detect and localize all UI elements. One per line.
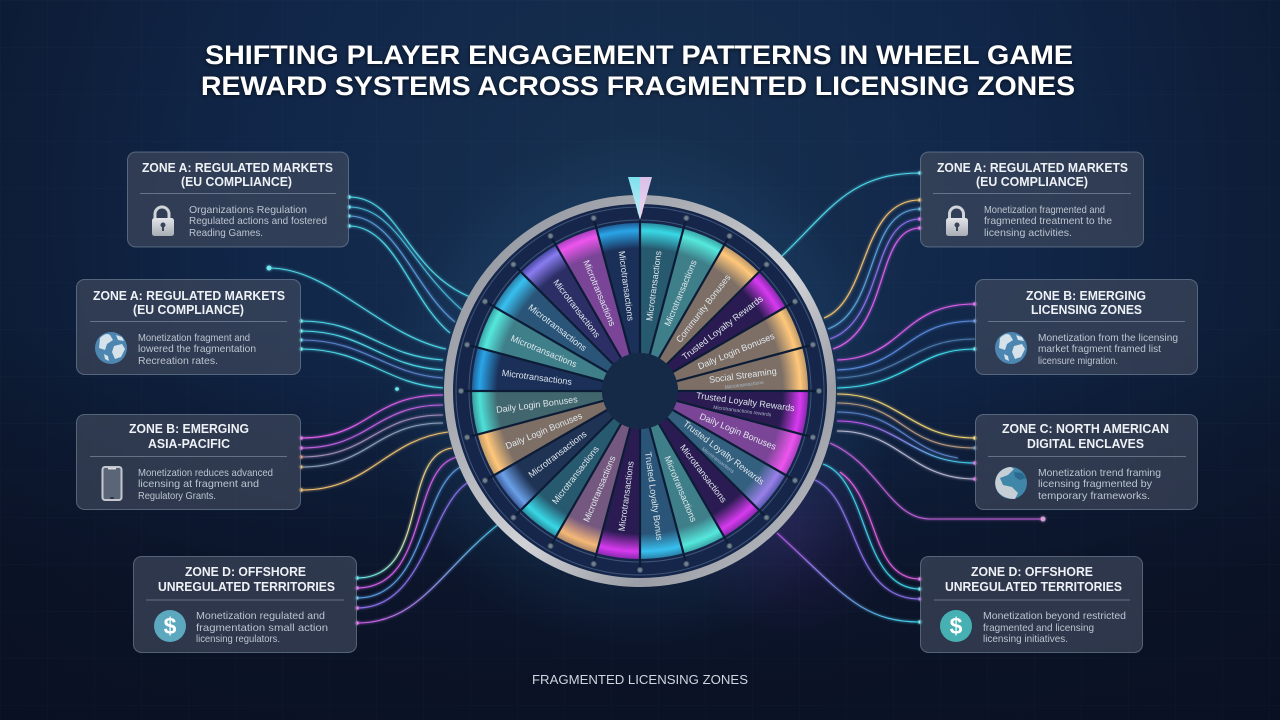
panel: zone A left second: [76, 280, 300, 374]
body text: temporary frameworks.: [1038, 490, 1150, 502]
wheel segment labels: Microtransactions: [678, 442, 729, 505]
heading: ZONE B: EMERGING: [1026, 289, 1146, 303]
body text: [196, 610, 328, 645]
wheel segment labels: Daily Login Bonuses: [698, 411, 778, 452]
heading: [1026, 289, 1146, 317]
icon: globe: [95, 332, 127, 364]
body text: Recreation rates.: [138, 355, 218, 367]
panel: zone C right: [976, 414, 1198, 510]
body text: Monetization trend framing: [1038, 467, 1161, 479]
wheel segment labels: [496, 250, 796, 541]
heading: [937, 161, 1128, 189]
wheel thin rings: [456, 207, 824, 575]
heading: (EU COMPLIANCE): [976, 175, 1088, 189]
heading: (EU COMPLIANCE): [181, 175, 292, 189]
body text: licensing activities.: [984, 227, 1072, 239]
connectors: panel left 2: [299, 319, 443, 391]
connectors: panel right 4: [777, 464, 922, 624]
wheel segment labels: Community Bonuses: [674, 272, 733, 344]
wheel: [448, 200, 832, 582]
body text: [138, 467, 273, 502]
heading: [142, 161, 333, 189]
heading: ZONE A: REGULATED MARKETS: [93, 289, 285, 303]
icon: dollar: [154, 610, 186, 642]
footer label: FRAGMENTED LICENSING ZONES: [532, 673, 748, 687]
body text: lowered the fragmentation: [138, 343, 256, 355]
title: [201, 40, 1075, 101]
heading: ZONE B: EMERGING: [129, 422, 249, 436]
body text: licensing regulators.: [196, 633, 280, 645]
panel: zone A left top: [128, 152, 348, 247]
body text: [984, 204, 1112, 239]
connector: free dot right: [830, 443, 1045, 521]
panel: zone D right: [920, 556, 1142, 652]
heading: DIGITAL ENCLAVES: [1027, 437, 1144, 451]
heading: ZONE D: OFFSHORE: [971, 565, 1093, 579]
body text: [1038, 332, 1178, 367]
wheel segment labels: Daily Login Bonuses: [496, 394, 579, 415]
heading: UNREGULATED TERRITORIES: [158, 580, 335, 594]
connectors: panel left 4: [355, 448, 500, 625]
body text: [138, 332, 256, 367]
icon: dollar: $: [950, 613, 963, 639]
wheel segment labels: Trusted Loyalty Rewards: [696, 390, 796, 413]
wheel base disc: [452, 203, 828, 579]
heading: ZONE A: REGULATED MARKETS: [142, 161, 333, 175]
pointer: [628, 177, 652, 220]
body text: fragmentation small action: [196, 622, 328, 634]
icon: earth: [995, 467, 1027, 499]
wheel segment labels: Trusted Loyalty Rewards: [681, 419, 767, 487]
icon: lock: [946, 207, 968, 236]
heading: LICENSING ZONES: [1031, 303, 1142, 317]
wheel segment labels: Daily Login Bonuses: [696, 331, 776, 372]
wheel segment labels: Trusted Loyalty Bonus: [643, 451, 665, 541]
wheel segment labels: Microtransactions: [662, 258, 699, 328]
body text: Regulated actions and fostered: [189, 215, 327, 227]
wheel segment labels: Microtransactions: [662, 454, 699, 524]
body text: Monetization fragment and: [138, 332, 250, 344]
title: REWARD SYSTEMS ACROSS FRAGMENTED LICENSING ZONES: [201, 71, 1075, 101]
wheel segment labels: Microtransactions: [551, 277, 602, 340]
body text: licensing at fragment and: [138, 478, 259, 490]
body text: licensing fragmented by: [1038, 478, 1153, 490]
icon: phone: [102, 467, 122, 500]
wheel segment labels: Microtransactions: [581, 454, 618, 523]
wheel segment labels: Microtransactions: [617, 250, 636, 322]
wheel segment labels: Trusted Loyalty Rewards: [680, 293, 765, 362]
panel: zone B right: [976, 280, 1198, 374]
heading: [945, 565, 1122, 594]
heading: ASIA-PACIFIC: [148, 437, 230, 451]
wheel segment labels: Microtransactions: [501, 368, 573, 387]
heading: UNREGULATED TERRITORIES: [945, 580, 1122, 594]
wheel segment labels: Microtransactions: [526, 429, 589, 480]
body text: Regulatory Grants.: [138, 490, 216, 502]
body text: licensing initiatives.: [983, 633, 1068, 645]
body text: Organizations Regulation: [189, 204, 307, 216]
panel: zone A right: [920, 152, 1144, 247]
heading: [158, 565, 335, 594]
title: SHIFTING PLAYER ENGAGEMENT PATTERNS IN WHEEL GAME: [205, 40, 1073, 70]
heading: [1002, 422, 1169, 451]
wheel segment labels: Microtransactions: [526, 302, 589, 353]
wheel segment labels: Microtransactions: [644, 250, 663, 322]
wheel spokes and pegs: [458, 209, 822, 573]
wheel segment labels: Microtransactions: [724, 380, 764, 391]
body text: Monetization fragmented and: [984, 204, 1105, 216]
body text: Reading Games.: [189, 227, 263, 239]
heading: ZONE D: OFFSHORE: [185, 565, 306, 579]
wheel segment labels: Daily Login Bonuses: [504, 410, 584, 451]
connectors: panel left 3: [299, 395, 448, 492]
panel: zone B left: [76, 414, 300, 510]
heading: [129, 422, 249, 451]
wheel segment labels: Social Streaming: [708, 366, 777, 385]
wheel segment labels: Microtransactions: [617, 460, 636, 532]
connector lines: [267, 171, 1045, 625]
body text: Monetization regulated and: [196, 610, 325, 622]
panel: zone D left: [134, 556, 356, 652]
connectors: panel right 3: [837, 394, 977, 481]
body text: Monetization reduces advanced: [138, 467, 273, 479]
icon: globe: [995, 332, 1027, 364]
body text: fragmented and licensing: [983, 622, 1094, 634]
connectors: panel right 1: [782, 171, 922, 349]
icon: dollar: $: [164, 613, 177, 639]
connectors: panel right 2: [837, 302, 977, 388]
heading: [93, 289, 285, 317]
body text: Monetization from the licensing: [1038, 332, 1178, 344]
heading: ZONE C: NORTH AMERICAN: [1002, 422, 1169, 436]
body text: [983, 610, 1126, 645]
body text: fragmented treatment to the: [984, 215, 1112, 227]
wheel segment labels: Microtransactions: [581, 259, 618, 328]
heading: ZONE A: REGULATED MARKETS: [937, 161, 1128, 175]
body text: Monetization beyond restricted: [983, 610, 1126, 622]
body text: [189, 204, 327, 239]
wheel segment labels: Microtransactions rewards: [713, 405, 772, 418]
wheel silver rim: [448, 200, 832, 582]
wheel segment labels: Microtransactions: [550, 444, 601, 506]
heading: (EU COMPLIANCE): [133, 303, 244, 317]
icon: dollar: [940, 610, 972, 642]
body text: [1038, 467, 1161, 502]
body text: market fragment framed list: [1038, 343, 1161, 355]
wheel segment labels: Microtransactions: [700, 446, 735, 475]
icon: lock: [152, 207, 174, 236]
body text: licensure migration.: [1038, 355, 1118, 367]
wheel segment labels: Microtransactions: [509, 333, 579, 370]
connectors: panel left 1: [267, 195, 470, 349]
wheel hub: [602, 353, 678, 429]
wheel segments: [466, 217, 814, 565]
